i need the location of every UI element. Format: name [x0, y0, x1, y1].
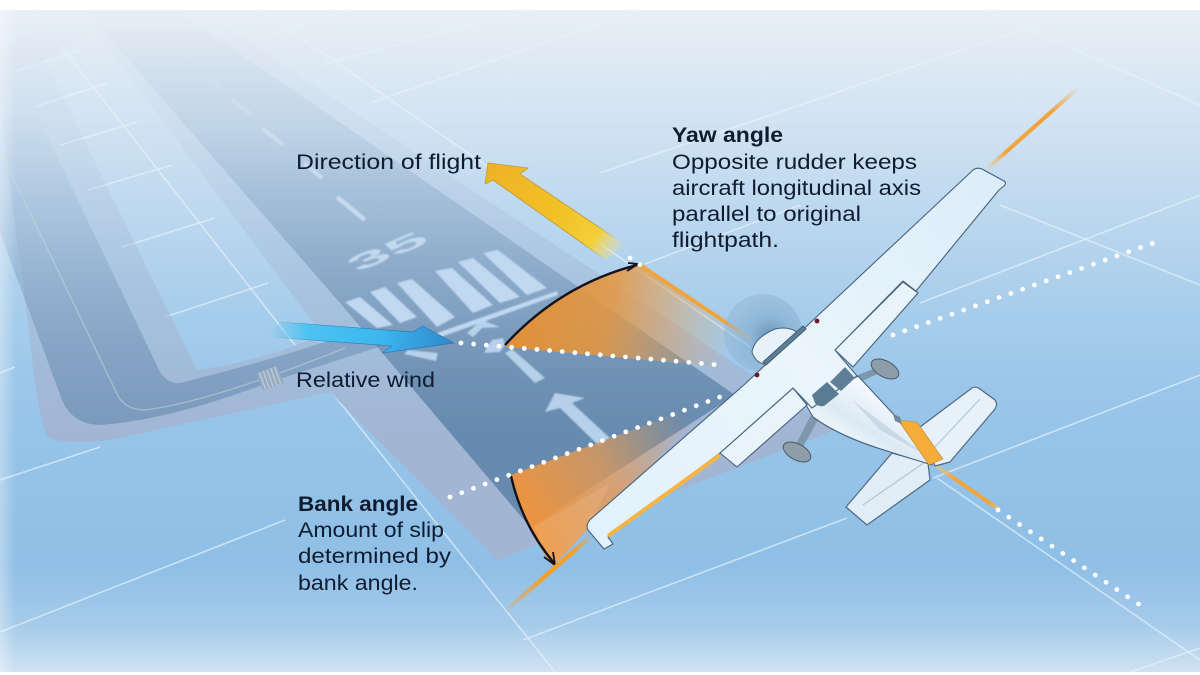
aileron orange trailing edge — [608, 455, 720, 536]
relative wind arrow — [270, 322, 454, 353]
direction of flight arrow — [485, 163, 624, 260]
airplane — [587, 168, 1006, 549]
taxiway centre line — [0, 150, 345, 410]
left landing gear — [780, 415, 818, 466]
wing — [587, 168, 1006, 549]
shoulder highlight over bank wedge — [533, 483, 610, 566]
propeller disc — [724, 294, 802, 372]
left edge fade — [0, 10, 16, 672]
runway centreline dashes — [160, 33, 365, 220]
hold-short marking — [257, 366, 283, 390]
fuselage spine shading — [852, 400, 925, 455]
engine cowling — [752, 328, 797, 364]
text block: bank angle — [298, 493, 452, 595]
upper stabilizer hinge line — [935, 399, 980, 447]
cabin window left — [812, 382, 839, 406]
wing-line orange extensions and yaw axis — [503, 88, 1078, 613]
text block: yaw angle: parallel to original — [672, 203, 861, 226]
text block: yaw angle — [672, 124, 921, 252]
lower stabilizer hinge line — [863, 462, 925, 505]
outboard flap, upper — [835, 282, 918, 367]
text block: yaw angle: Opposite rudder keeps — [672, 151, 917, 174]
runway number 35: 35 — [338, 227, 437, 275]
wing-tip lights — [755, 319, 819, 377]
text block: yaw angle: Yaw angle — [672, 124, 783, 147]
small arrow markings — [404, 320, 610, 445]
label: relative wind: Relative wind — [296, 369, 435, 392]
windscreen — [763, 326, 806, 365]
text block: yaw angle: flightpath. — [672, 229, 779, 252]
bank angle arc arrow — [511, 476, 555, 565]
fin tip — [893, 414, 902, 424]
upper stabilizer — [920, 387, 996, 466]
taxiway pavement — [0, 100, 385, 425]
text block: bank angle: Bank angle — [298, 493, 418, 516]
threshold stripes — [345, 250, 547, 328]
text block: yaw angle: aircraft longitudinal axis — [672, 177, 921, 200]
yaw angle wedge — [505, 263, 750, 367]
dotted lines: relative wind, lateral axis, flight path — [450, 240, 1162, 605]
bank angle wedge — [511, 398, 718, 566]
inboard flap, lower — [720, 388, 807, 467]
fuselage — [806, 376, 932, 465]
runway and taxiway shoulder — [0, 10, 835, 560]
yaw angle arc arrow — [505, 263, 638, 345]
text block: bank angle: determined by — [298, 545, 452, 568]
threshold bar — [437, 291, 558, 338]
text block: bank angle: bank angle. — [298, 572, 418, 595]
runway pavement — [85, 10, 735, 527]
rudder — [898, 420, 943, 465]
right landing gear — [858, 355, 902, 383]
runway markings — [160, 33, 610, 445]
lower stabilizer — [846, 453, 930, 525]
text block: bank angle: Amount of slip — [298, 519, 444, 542]
cabin window right — [830, 367, 855, 391]
label: direction of flight: Direction of flight — [296, 151, 481, 174]
